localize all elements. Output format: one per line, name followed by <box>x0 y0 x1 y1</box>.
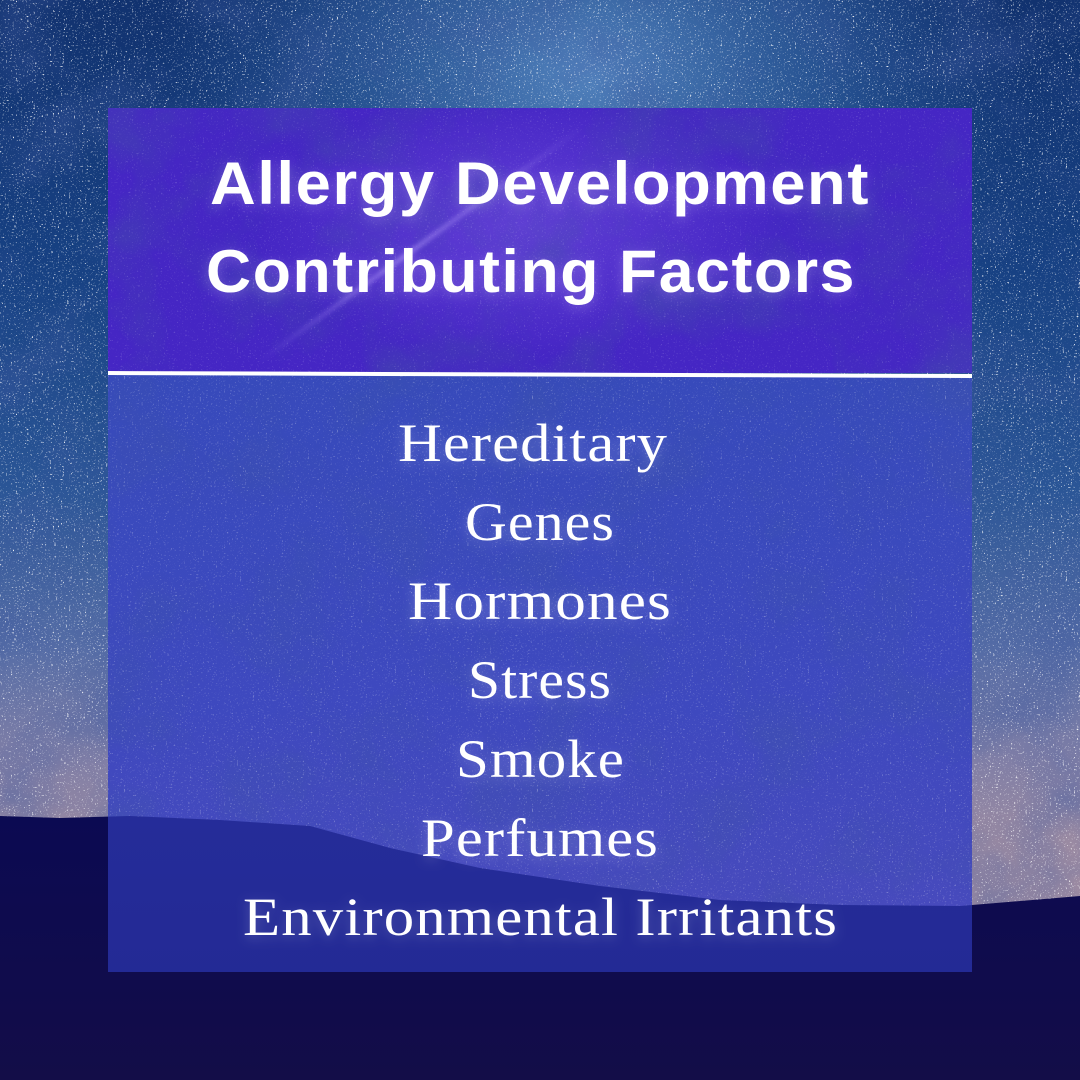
list item: Genes <box>465 492 615 552</box>
list item: Stress <box>468 650 612 710</box>
panel: factors list <box>108 375 972 972</box>
title: Contributing Factors <box>206 238 856 305</box>
title: Allergy Development <box>210 150 870 217</box>
background: dark hills <box>0 816 1080 1080</box>
list item: Environmental Irritants <box>243 887 838 947</box>
title <box>206 150 870 305</box>
list item: Hormones <box>408 571 672 631</box>
panel: title header <box>108 95 972 373</box>
list item: Smoke <box>456 729 625 789</box>
list item: Hereditary <box>398 413 668 473</box>
list item: Perfumes <box>421 808 659 868</box>
divider line <box>108 371 972 378</box>
